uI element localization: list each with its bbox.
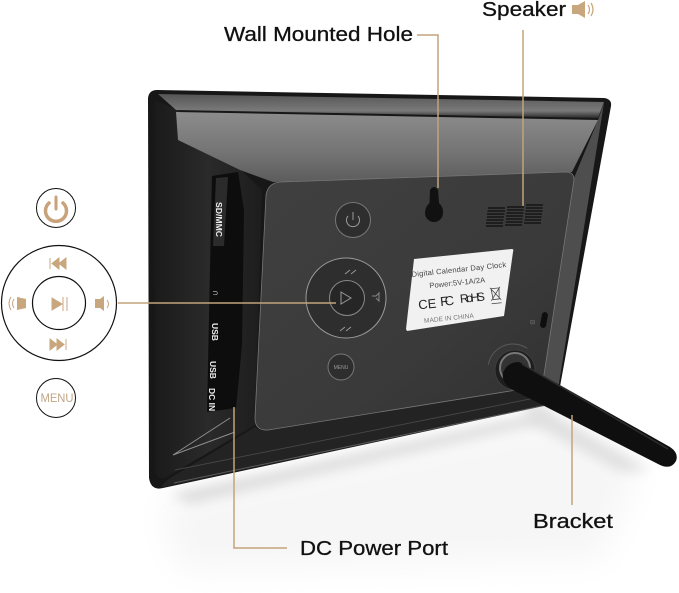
side switch slot: ⊟ bbox=[530, 320, 535, 326]
bottom highlight lines bbox=[175, 396, 545, 470]
icon: menu button diagram bbox=[36, 378, 76, 418]
bracket bbox=[484, 340, 677, 467]
control pad diagram bbox=[2, 246, 116, 360]
physical buttons bbox=[306, 202, 386, 380]
side ports strip: ∩ bbox=[211, 290, 221, 296]
callout line: speaker bbox=[522, 30, 524, 206]
d-pad bbox=[306, 258, 386, 338]
top rim bbox=[158, 94, 604, 118]
icon: menu button diagram: MENU bbox=[40, 391, 74, 405]
callout line: DC power port bbox=[234, 407, 287, 548]
icon: previous bbox=[50, 258, 66, 269]
power button bbox=[336, 202, 370, 238]
right bevel bbox=[540, 103, 604, 402]
label: DC Power Port: DC Power Port bbox=[300, 538, 448, 560]
side port triangle highlight bbox=[173, 418, 235, 455]
photo frame body bbox=[148, 90, 611, 489]
label: Wall Mounted Hole: Wall Mounted Hole bbox=[224, 24, 413, 46]
side ports strip: USB bbox=[210, 323, 220, 341]
speaker grille bbox=[486, 205, 543, 226]
icon: volume up bbox=[95, 296, 104, 311]
side ports strip: DC IN bbox=[207, 388, 217, 411]
callout line: control pad bbox=[118, 302, 336, 304]
label: Bracket: Bracket bbox=[533, 511, 614, 533]
side switch slot bbox=[530, 312, 548, 328]
rating label: FC bbox=[439, 293, 455, 309]
callout line: bracket bbox=[571, 415, 573, 505]
icon: next bbox=[50, 339, 66, 350]
left bevel bbox=[154, 100, 262, 478]
rating label bbox=[406, 249, 513, 331]
icon: volume down bbox=[9, 297, 26, 310]
rating label: RoHS bbox=[459, 289, 486, 306]
recessed back panel bbox=[255, 172, 574, 430]
top bevel bbox=[176, 112, 598, 182]
rating label: Digital Calendar Day Clock bbox=[411, 260, 507, 279]
outer frame bbox=[148, 90, 611, 489]
icon: power button diagram bbox=[36, 188, 76, 228]
icon: speaker bbox=[572, 1, 593, 18]
icon: play pause bbox=[52, 297, 67, 311]
rating label: CE bbox=[418, 296, 437, 312]
physical buttons: MENU bbox=[334, 365, 349, 371]
port labels: SD/MMC bbox=[214, 202, 224, 237]
side ports strip: USB bbox=[208, 361, 218, 379]
callout line: wall mounted hole bbox=[417, 35, 438, 188]
rating label: MADE IN CHINA bbox=[424, 313, 475, 325]
bottom bevel bbox=[162, 384, 556, 487]
menu button bbox=[328, 354, 354, 380]
side ports strip bbox=[173, 172, 244, 455]
floor shadow bbox=[160, 400, 650, 570]
wall mount keyhole bbox=[425, 187, 443, 222]
rating label: Power:5V-1A/2A bbox=[429, 275, 486, 290]
